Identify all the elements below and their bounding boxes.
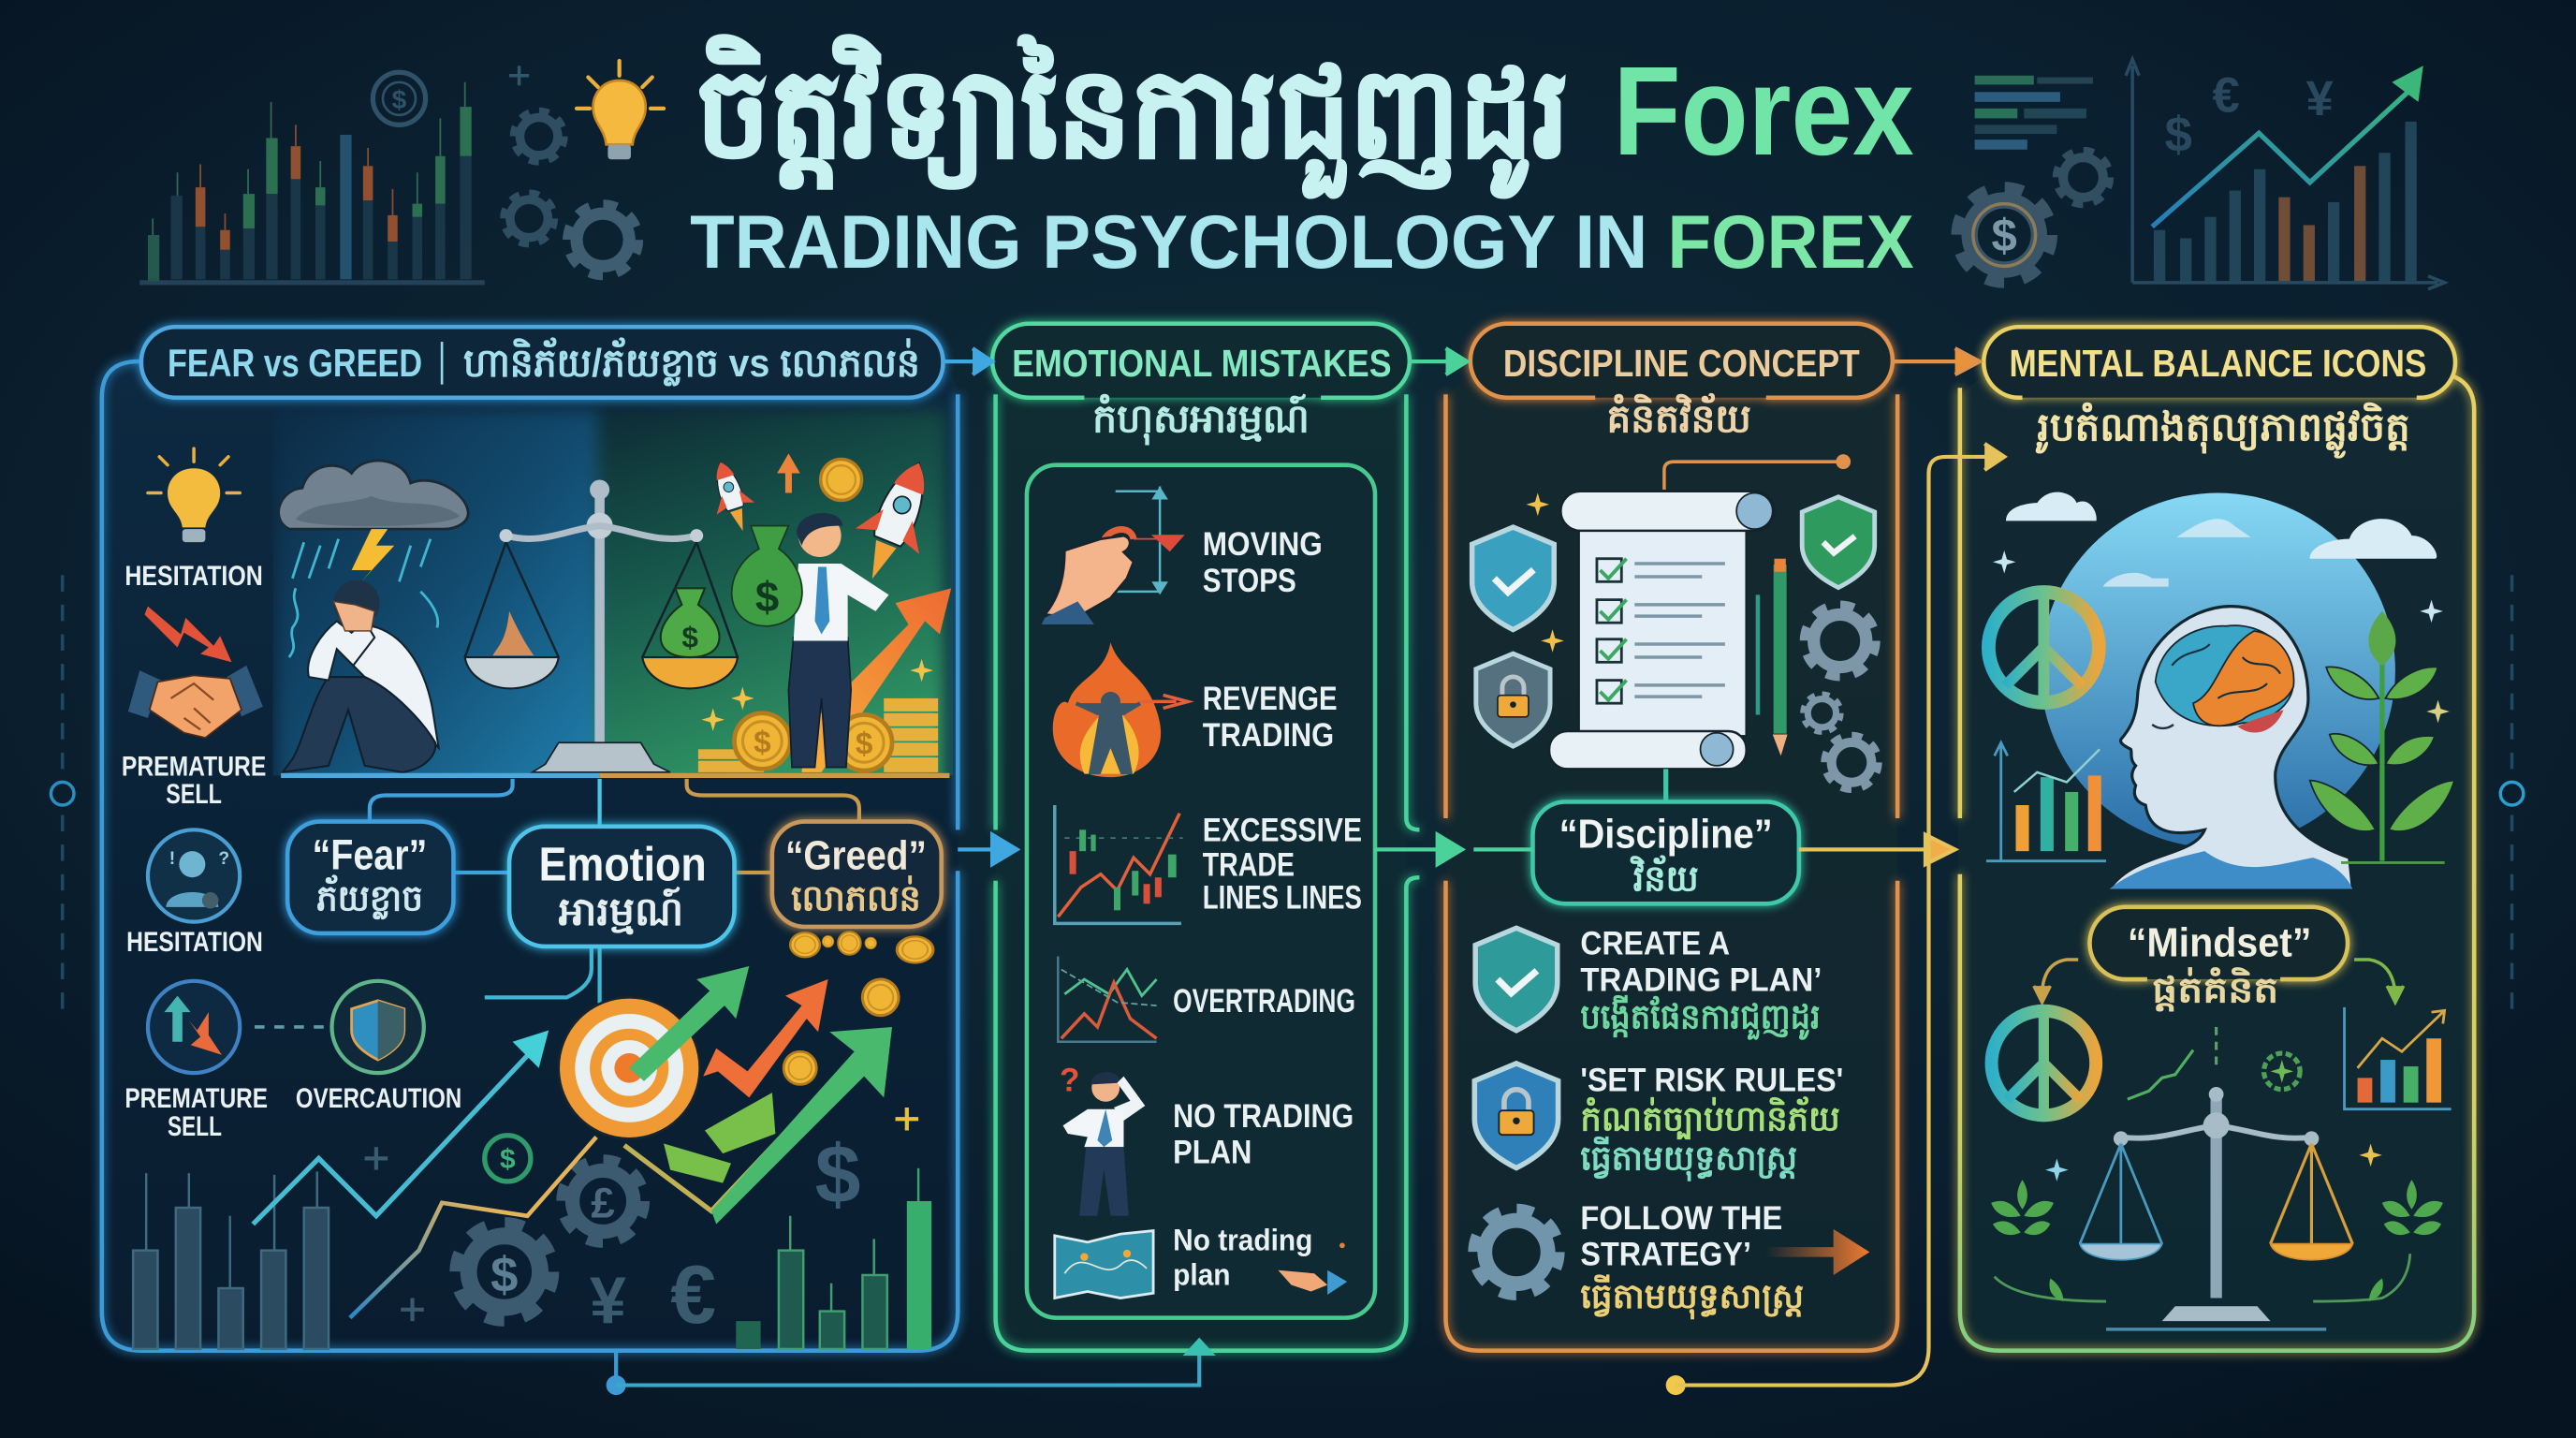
icon: pointing hand — [1278, 1243, 1347, 1295]
decoration: currency symbols and gears: $ — [490, 1248, 518, 1303]
connector: pill 2 to pill 3 — [1410, 348, 1467, 374]
icon: peace symbol — [1988, 593, 2099, 702]
label: moving stops: MOVING — [1203, 526, 1323, 563]
label: premature sell: PREMATURE — [122, 751, 266, 782]
icon: revenge flame — [1053, 642, 1188, 777]
panel header: mental balance — [1983, 327, 2455, 459]
label: overcaution: OVERCAUTION — [296, 1083, 461, 1114]
label: no trading plan lower — [1173, 1224, 1312, 1291]
label: excessive trade lines: TRADE — [1203, 846, 1295, 883]
panel header: fear vs greed: FEAR vs GREED — [168, 341, 422, 385]
connectors: balance to fear, emotion, greed — [370, 779, 859, 1010]
step: create plan — [1475, 926, 1822, 1041]
chart: rising arrows and target — [253, 966, 905, 1318]
step: follow strategy — [1475, 1200, 1869, 1320]
panel: mental balance icons — [1958, 327, 2474, 1351]
icon: lock shield — [1476, 653, 1550, 746]
icon: plant — [2310, 611, 2454, 862]
panel: emotional mistakes — [992, 324, 1419, 1351]
connector: pill 1 to pill 2 — [943, 348, 992, 374]
decoration: currency symbols and gears: ¥ — [590, 1263, 626, 1337]
icon: handshake — [128, 666, 263, 738]
icon: pen — [1758, 559, 1788, 756]
icon: peace symbol lower — [1992, 1011, 2096, 1115]
label: no trading plan upper: PLAN — [1173, 1135, 1251, 1171]
label: no trading plan upper — [1173, 1098, 1354, 1171]
step: follow strategy: FOLLOW THE — [1580, 1200, 1782, 1237]
panel header: fear vs greed: ហានិភ័យ/ភ័យខ្លាច vs លោភលន់ — [463, 337, 920, 387]
illustration: calm head with brain — [2006, 492, 2437, 889]
label: revenge trading — [1203, 681, 1338, 754]
decoration: right gears and coin — [1959, 152, 2109, 281]
step: risk rules: កំណត់ច្បាប់ហានិភ័យ — [1580, 1096, 1840, 1140]
icon: confused man — [1060, 1062, 1145, 1216]
box: greed: “Greed” — [785, 832, 927, 878]
icon: light bulb — [577, 61, 664, 159]
icon: gold coins row — [790, 932, 933, 962]
decoration: currency symbols and gears — [365, 1108, 918, 1341]
icon: map — [1055, 1231, 1153, 1299]
box: mindset: ផ្តត់គំនិត — [2152, 967, 2278, 1013]
chart: excessive trade lines — [1055, 805, 1183, 923]
title: English: TRADING PSYCHOLOGY IN — [690, 200, 1647, 285]
decoration: gears top left — [505, 66, 637, 274]
label: excessive trade lines: LINES LINES — [1203, 880, 1362, 917]
icon: up-down arrows circle — [148, 981, 240, 1073]
figure: greedy trader with money: $ — [856, 727, 873, 762]
decoration: currency symbols and gears: $ — [500, 1144, 516, 1175]
chart: lower candlesticks — [133, 1168, 931, 1349]
icons: stars — [1526, 493, 1564, 653]
connector: discipline to mental balance — [1799, 835, 1955, 864]
decoration: currency symbols and gears: $ — [815, 1129, 861, 1221]
label: premature sell 2: PREMATURE — [124, 1083, 268, 1114]
connector: bottom node to mental balance — [1666, 444, 2004, 1395]
icon: person circle — [148, 829, 240, 922]
panel: discipline concept — [1445, 324, 1897, 1351]
label: overtrading: OVERTRADING — [1173, 983, 1355, 1020]
scene background: fear and greed sides — [276, 411, 946, 792]
chart: overtrading — [1058, 956, 1157, 1042]
decoration: dollar coin top left: $ — [392, 85, 407, 114]
decoration: right gears and coin: $ — [1992, 212, 2017, 262]
label: no trading plan lower: plan — [1173, 1257, 1231, 1291]
label: premature sell 2 — [124, 1083, 268, 1142]
connector: dashed — [255, 1026, 329, 1028]
box: discipline: “Discipline” — [1559, 812, 1773, 858]
title: Khmer and Forex: Forex — [1614, 40, 1914, 182]
panel header: discipline concept — [1471, 324, 1893, 441]
panel header: mental balance: MENTAL BALANCE ICONS — [2009, 342, 2426, 385]
decoration: dollar coin top left — [373, 72, 426, 125]
label: premature sell: SELL — [166, 779, 222, 810]
label: revenge trading: TRADING — [1203, 717, 1334, 754]
step: create plan: CREATE A — [1580, 926, 1730, 962]
icon: falling arrow — [144, 607, 231, 662]
connector: scroll to node — [1664, 454, 1851, 490]
figure: greedy trader with money: $ — [754, 726, 771, 760]
icon: person circle: ! — [169, 849, 175, 869]
decoration: right growth chart: € — [2213, 67, 2240, 123]
box: mindset: “Mindset” — [2128, 919, 2311, 965]
label: no trading plan upper: NO TRADING — [1173, 1098, 1354, 1135]
label: moving stops — [1203, 526, 1323, 599]
step: risk rules — [1474, 1062, 1843, 1182]
icon: storm cloud — [279, 461, 468, 581]
panel header: discipline concept: គំនិតវិន័យ — [1606, 393, 1751, 441]
icons: gears — [1804, 607, 1878, 788]
label: premature sell 2: SELL — [168, 1111, 222, 1142]
icons: sparkles lower — [2045, 1144, 2382, 1181]
label: revenge trading: REVENGE — [1203, 681, 1338, 717]
panel header: emotional mistakes: កំហុសអារម្មណ៍ — [1092, 394, 1310, 447]
step: follow strategy: STRATEGY’ — [1580, 1236, 1751, 1272]
step: risk rules: ធ្វើតាមយុទ្ធសាស្ត្រ — [1580, 1137, 1797, 1182]
panel header: mental balance: រូបតំណាងតុល្យភាពផ្លូវចិត្ត — [2035, 402, 2410, 459]
title: Khmer and Forex: ចិត្តវិទ្យានៃការជួញដូរ — [696, 35, 1569, 198]
icons: leaf sprigs — [1991, 1180, 2443, 1301]
connector: pill 3 to pill 4 — [1893, 348, 1980, 374]
decoration: right growth chart — [2126, 59, 2445, 289]
panel header: emotional mistakes: EMOTIONAL MISTAKES — [1012, 342, 1392, 385]
box: greed: លោភលន់ — [791, 874, 921, 918]
panel header: emotional mistakes — [992, 324, 1410, 447]
decoration: right growth chart: $ — [2165, 107, 2192, 162]
panel header: discipline concept: DISCIPLINE CONCEPT — [1503, 342, 1860, 385]
panel: fear vs greed — [102, 327, 958, 1351]
decoration: right list bars — [1975, 76, 2093, 150]
label: hesitation: HESITATION — [124, 561, 263, 592]
decoration: side nodes — [51, 575, 2524, 1019]
icon: green squiggle and badge — [2128, 1027, 2300, 1099]
step: create plan: TRADING PLAN’ — [1580, 961, 1822, 998]
step: follow strategy: ធ្វើតាមយុទ្ធសាស្ត្រ — [1580, 1274, 1804, 1320]
label: moving stops: STOPS — [1203, 563, 1296, 599]
box: emotion: អារម្មណ៍ — [559, 887, 683, 935]
icon: checklist scroll — [1549, 492, 1775, 769]
decoration: currency symbols and gears: £ — [591, 1180, 615, 1227]
box: mindset — [2089, 907, 2348, 1013]
label: excessive trade lines: EXCESSIVE — [1203, 813, 1362, 849]
figure: greedy trader with money: $ — [755, 573, 779, 621]
box: discipline — [1533, 801, 1799, 903]
decoration: left candlestick chart — [139, 82, 485, 283]
box: greed — [772, 822, 942, 927]
title: English: FOREX — [1667, 200, 1914, 285]
icon: bulb — [148, 448, 240, 542]
connector: bottom line to emotional mistakes — [607, 1338, 1216, 1395]
step: risk rules: 'SET RISK RULES' — [1580, 1062, 1843, 1098]
figure: greedy trader with money — [698, 450, 951, 772]
box: fear: ភ័យខ្លាច — [316, 873, 423, 919]
step: create plan: បង្កើតផែនការជួញដូរ — [1580, 995, 1821, 1041]
balance platform — [281, 774, 949, 777]
figure: balance scale — [465, 479, 738, 772]
figure: balance scale: $ — [681, 621, 698, 654]
connector: list to discipline — [1375, 835, 1533, 864]
chart: mindset bars — [2345, 1007, 2452, 1109]
icon: person circle: ? — [218, 849, 229, 869]
icon: hand moving stop — [1042, 487, 1183, 624]
decoration: currency symbols and gears: € — [670, 1249, 716, 1341]
box: fear: “Fear” — [312, 830, 427, 878]
icon: green shield check — [1802, 497, 1875, 588]
box: discipline: វិន័យ — [1630, 854, 1699, 899]
connector: panel 1 to mistakes list — [958, 835, 1017, 864]
icon: blue shield check — [1472, 527, 1554, 630]
icons: sparkles — [1993, 550, 2450, 723]
arrows: mindset branches — [2034, 960, 2404, 1003]
icon: confused man: ? — [1060, 1062, 1079, 1098]
label: hesitation: HESITATION — [126, 927, 263, 958]
box: emotion — [509, 827, 735, 946]
label: no trading plan lower: No trading — [1173, 1224, 1312, 1257]
box: emotion: Emotion — [539, 838, 707, 891]
title: Khmer and Forex — [696, 35, 1914, 198]
chart: small growth — [1986, 742, 2106, 861]
list box: mistakes — [1027, 465, 1375, 1318]
panel header: fear vs greed — [141, 327, 943, 398]
box: fear — [287, 822, 453, 933]
icon: shield circle — [332, 981, 424, 1073]
label: premature sell — [122, 751, 266, 810]
figure: distressed trader — [283, 580, 439, 772]
label: excessive trade lines — [1203, 813, 1362, 917]
icon: balance scale lower — [1995, 1087, 2410, 1329]
decoration: right growth chart: ¥ — [2306, 71, 2334, 126]
